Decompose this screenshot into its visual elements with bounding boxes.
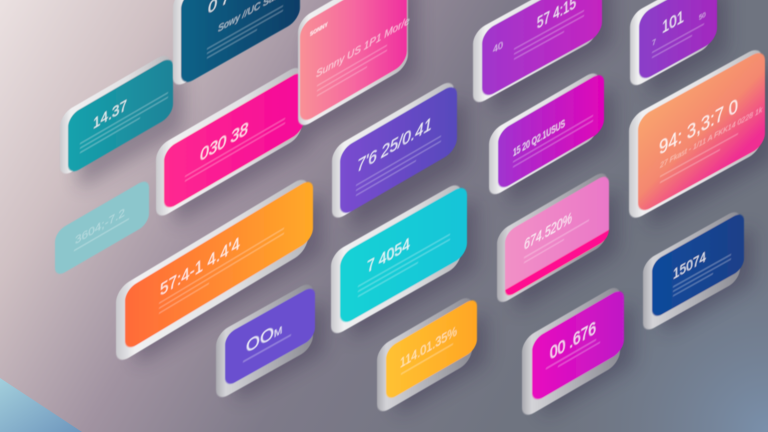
- card: amber 114.01.35%: [377, 290, 477, 416]
- value: 030 38: [200, 117, 249, 165]
- caption lines: [80, 92, 168, 153]
- value: 7'6 25/0.41: [357, 113, 432, 176]
- caption lines: [660, 133, 738, 183]
- caption lines: [356, 135, 441, 196]
- caption lines: [185, 118, 285, 182]
- caption line: [401, 343, 453, 375]
- value: 7 4054: [367, 233, 410, 276]
- card: navy 07: [173, 0, 300, 92]
- caption lines: [652, 23, 704, 58]
- card: deep blue 15074: [643, 205, 744, 334]
- card: hot pink 030 38: [156, 62, 304, 221]
- card: orange pink 94 3,3:7 0: [629, 43, 765, 223]
- value: 114.01.35%: [400, 323, 457, 371]
- card: orange 57:4-1 4.4'4: [116, 171, 313, 365]
- card: salmon pink gradient: [298, 0, 410, 130]
- card: violet 00M: [216, 279, 315, 402]
- value: 00 .676: [550, 317, 596, 364]
- bottom accent band: [505, 229, 609, 299]
- side figure: 40: [493, 40, 503, 56]
- heading: Sunny US 1P1 Mor/e: [316, 15, 410, 80]
- subtitle: 27 Fkast - 1/11 A FKK14 0228 1k: [659, 104, 763, 170]
- side figure: 7: [652, 37, 656, 48]
- card: magenta 00 .676: [522, 281, 624, 420]
- caption lines: [317, 45, 387, 97]
- card: cyan 7 4054: [331, 177, 467, 338]
- value: 57:4-1 4.4'4: [160, 232, 240, 300]
- caption lines: [513, 115, 593, 168]
- card: purple 57 4:15: [473, 0, 602, 107]
- caption lines: [358, 234, 450, 297]
- card: pink 674.520%: [497, 168, 609, 307]
- value: 15 20 Q2.1USUS: [513, 118, 565, 159]
- card: teal 14.37: [60, 49, 173, 181]
- caption lines: [673, 254, 731, 297]
- value: 3604;-7.2: [75, 205, 125, 247]
- top-right figure: 50: [699, 11, 706, 22]
- caption lines: [514, 10, 584, 60]
- corner accent: blue wedge: [0, 378, 82, 432]
- brand label: SONNY: [310, 22, 328, 38]
- value: 674.520%: [524, 209, 572, 254]
- value: OOM: [246, 317, 282, 358]
- value: 15074: [673, 249, 706, 283]
- card: magenta 15 20: [489, 66, 604, 199]
- caption lines: [524, 219, 589, 263]
- card: indigo 7'6 25/0.41: [332, 76, 457, 223]
- value: 14.37: [93, 96, 127, 133]
- value: 94: 3,3:7 0: [659, 96, 738, 160]
- caption lines: [207, 5, 283, 59]
- card: purple 101: [630, 0, 717, 90]
- caption line: [243, 334, 291, 363]
- caption line: [74, 218, 129, 251]
- card: pale teal: [55, 177, 149, 278]
- caption lines: [159, 228, 284, 314]
- value: 101: [662, 5, 684, 37]
- caption lines: [546, 337, 600, 374]
